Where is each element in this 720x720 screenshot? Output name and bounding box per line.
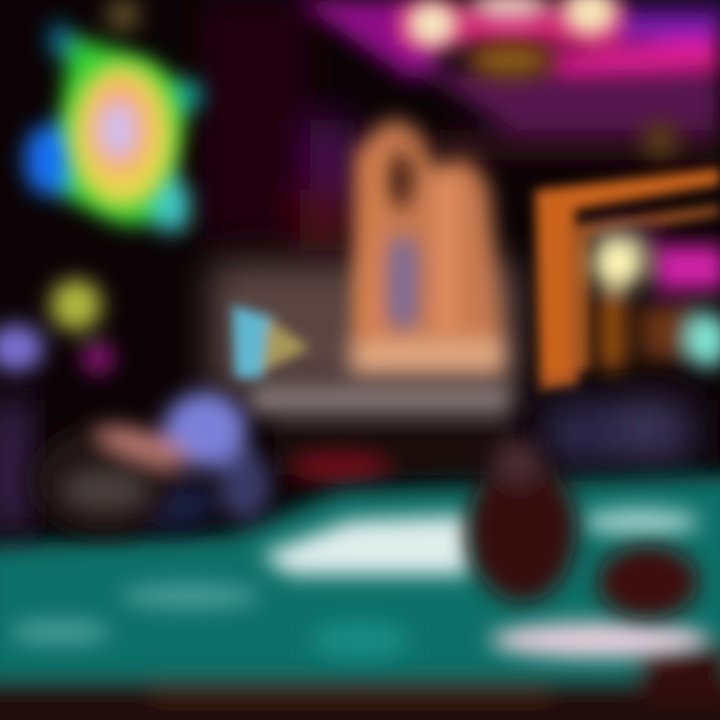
icon: rainbow gem sign: [24, 22, 202, 233]
panel: right dark seating: [545, 395, 695, 465]
panel: right figures in foreground: [468, 438, 698, 618]
panel: orange door frame: [535, 168, 720, 390]
panel: grey wall: [210, 262, 520, 392]
panel: wall base: [250, 385, 515, 484]
icon: small lights on left: [0, 279, 114, 374]
panel: left figure with purple shape: [0, 392, 271, 535]
panel: dark upper wall: [200, 0, 355, 250]
icon: play triangle: [232, 305, 310, 378]
panel: ceiling: [295, 0, 720, 160]
icon: chandelier: [105, 0, 678, 158]
panel: teal table: [0, 475, 720, 720]
panel: orange arched window: [350, 120, 505, 374]
